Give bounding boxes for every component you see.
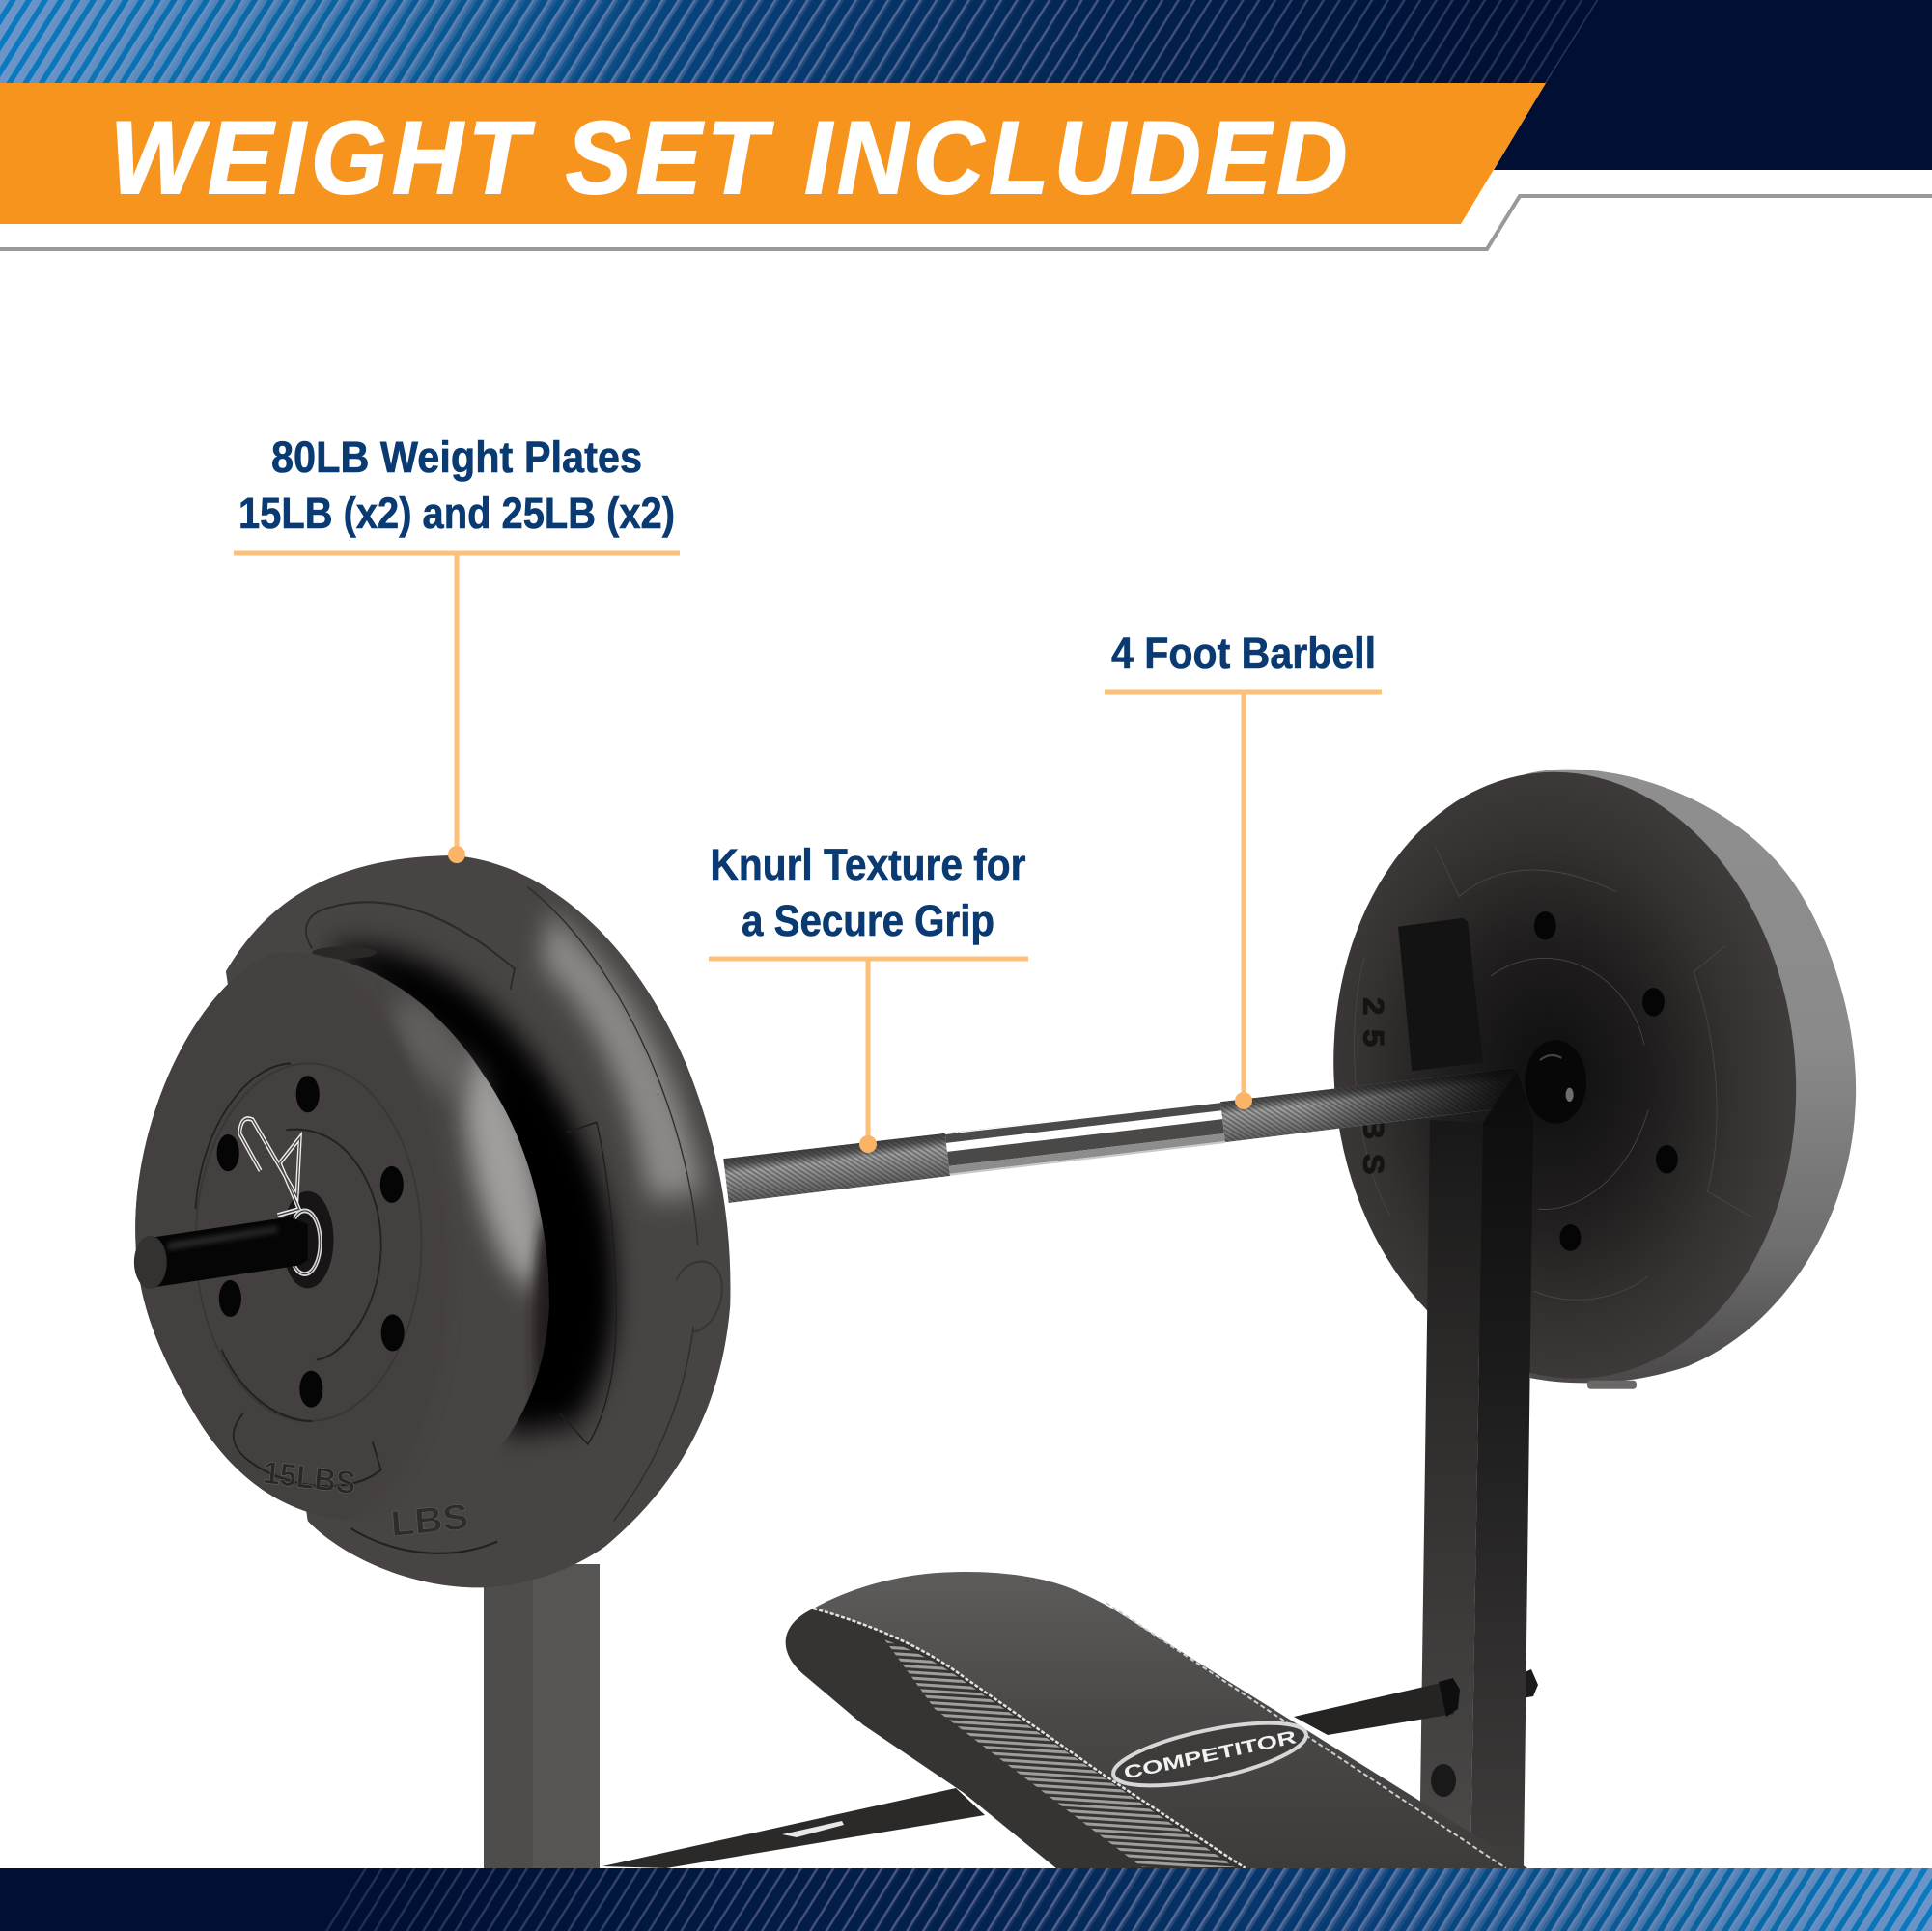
rear cross bar and collar	[1294, 1678, 1460, 1735]
seat ribs	[884, 1639, 1235, 1867]
seat seam	[813, 1609, 1246, 1868]
seat top	[813, 1572, 1527, 1868]
callout: weight plates	[234, 433, 680, 863]
large plate peg	[676, 1262, 722, 1331]
callout: knurl texture: Knurl Texture for	[711, 840, 1025, 889]
shadow between plates	[325, 946, 615, 1434]
callout: barbell: 4 Foot Barbell	[1111, 629, 1376, 678]
barbell	[723, 1065, 1520, 1203]
small plate label	[234, 1413, 381, 1486]
left weight plates	[93, 855, 730, 1587]
bar collar	[1525, 1040, 1586, 1124]
left upright	[484, 1564, 600, 1868]
sleeve shadow	[282, 1191, 334, 1288]
plate foot	[1587, 1381, 1637, 1389]
seat logo	[1108, 1710, 1311, 1799]
spring clip	[239, 1119, 321, 1274]
seat pad	[786, 1572, 1527, 1868]
right upright	[1419, 1071, 1533, 1868]
plate face	[1302, 743, 1828, 1408]
seat side	[786, 1609, 1246, 1868]
small plate	[135, 952, 549, 1522]
callout: knurl texture	[709, 840, 1028, 1153]
lower cross bar	[602, 1669, 1538, 1868]
plate holes	[217, 1076, 405, 1408]
callout: weight plates: 15LB (x2) and 25LB (x2)	[238, 489, 675, 538]
seat logo: COMPETITOR	[1122, 1727, 1299, 1784]
large plate label recess	[306, 902, 515, 990]
callout: barbell	[1105, 629, 1382, 1109]
header band with stripes	[0, 0, 1932, 170]
title banner	[0, 83, 1546, 224]
footer band with stripes	[0, 1868, 1932, 1931]
plate holes	[1534, 911, 1678, 1251]
large plate rim highlight	[541, 912, 704, 1199]
header rule	[0, 196, 1932, 249]
large plate	[226, 855, 730, 1587]
left weight plates: 15LBS	[262, 1456, 357, 1501]
callout: knurl texture: a Secure Grip	[742, 896, 994, 945]
small plate rings	[196, 1063, 422, 1421]
right weight plate	[1302, 743, 1856, 1408]
rack hook back	[1398, 918, 1483, 1071]
plate rim	[1514, 770, 1856, 1383]
plate weight mark: 25 LBS	[1358, 997, 1389, 1174]
callout: weight plates: 80LB Weight Plates	[271, 433, 642, 482]
small plate side highlight	[133, 859, 548, 1512]
left weight plates: LBS	[389, 1497, 469, 1545]
small plate face	[135, 954, 411, 1512]
barbell end	[153, 1217, 308, 1287]
large plate label	[350, 1528, 497, 1553]
smooth centre section	[945, 1101, 1225, 1177]
title: WEIGHT SET INCLUDED	[110, 99, 1353, 215]
plate rings	[1355, 847, 1752, 1300]
upright hole	[1431, 1764, 1456, 1797]
